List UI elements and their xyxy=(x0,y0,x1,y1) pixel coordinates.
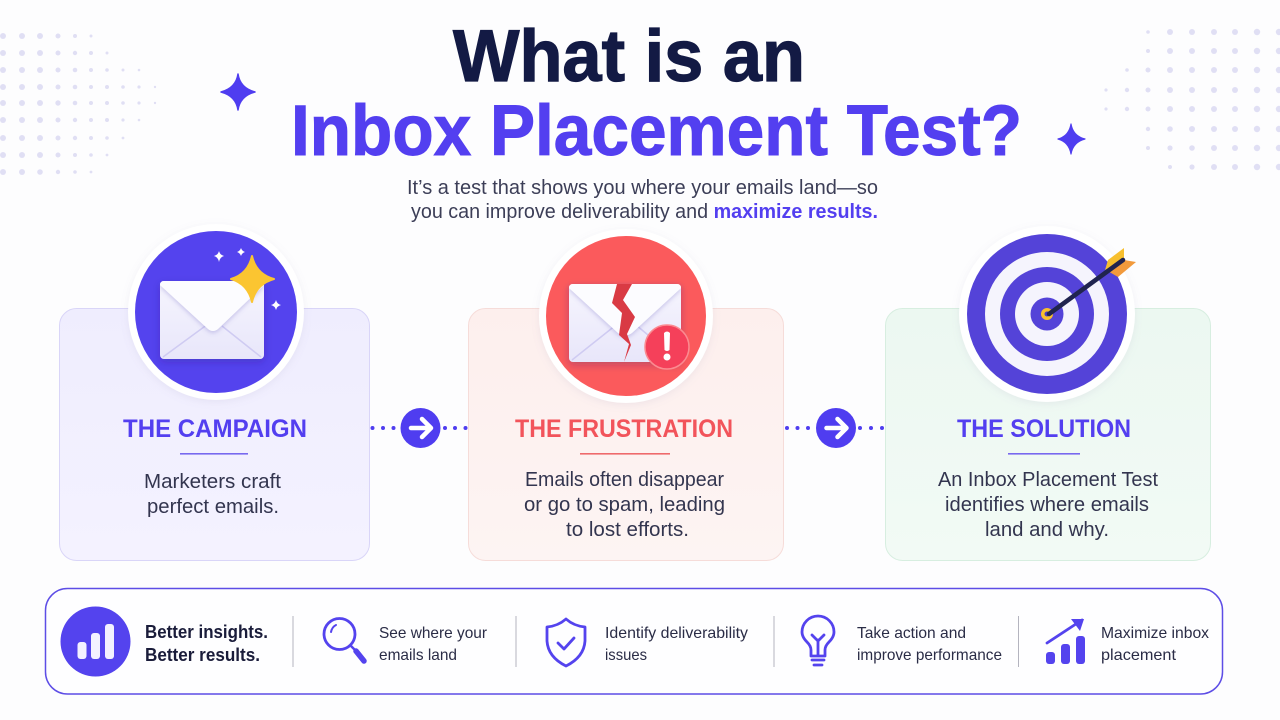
title xyxy=(291,16,1022,171)
subtitle: It’s a test that shows you where your emails land—so xyxy=(407,177,878,199)
subtitle: you can improve deliverability and maximize results. xyxy=(411,201,878,223)
icon: cracked envelope with alert xyxy=(539,229,713,403)
text: maximize inbox placement: Maximize inbox xyxy=(1101,625,1209,642)
panel: the campaign xyxy=(60,224,370,560)
icon: magnifying glass xyxy=(324,618,364,661)
heading: the frustration: THE FRUSTRATION xyxy=(515,415,733,443)
title: Inbox Placement Test? xyxy=(291,92,1022,171)
text: the campaign description xyxy=(144,471,281,518)
dot pattern: top right xyxy=(1104,29,1280,170)
icon: growth chart with arrow xyxy=(1046,619,1085,664)
text: see where your emails land xyxy=(379,625,488,664)
text: better insights: Better results. xyxy=(145,645,260,665)
heading: the solution: THE SOLUTION xyxy=(957,415,1131,443)
icon: bar chart badge xyxy=(60,606,130,676)
text: the solution description: identifies where emails xyxy=(945,494,1149,516)
text: identify deliverability issues xyxy=(605,625,748,664)
icon: envelope with gold sparkle xyxy=(128,224,304,400)
text: maximize inbox placement xyxy=(1101,625,1209,664)
icon: sparkle right of title xyxy=(1058,124,1085,154)
subtitle xyxy=(407,177,878,223)
text: the campaign description: Marketers craft xyxy=(144,471,281,493)
text: identify deliverability issues: Identify deliverability xyxy=(605,625,748,642)
icon: light bulb xyxy=(802,616,834,665)
text: identify deliverability issues: issues xyxy=(605,647,647,664)
heading: the campaign: THE CAMPAIGN xyxy=(123,415,307,443)
text: the solution description: land and why. xyxy=(985,519,1109,541)
text: see where your emails land: See where your xyxy=(379,625,488,642)
text: the frustration description: Emails often disappear xyxy=(525,469,724,491)
text: better insights: Better insights. xyxy=(145,622,268,642)
text: the frustration description xyxy=(524,469,725,541)
text: the solution description: An Inbox Placement Test xyxy=(938,469,1158,491)
text: better insights xyxy=(145,622,268,665)
title: What is an xyxy=(453,16,805,97)
text: maximize inbox placement: placement xyxy=(1101,647,1177,664)
text: the frustration description: to lost efforts. xyxy=(566,519,689,541)
text: the frustration description: or go to spam, leading xyxy=(524,494,725,516)
icon: shield with check xyxy=(547,619,585,666)
text: see where your emails land: emails land xyxy=(379,647,457,664)
text: the solution description xyxy=(938,469,1158,541)
icon: target with arrow xyxy=(959,226,1136,402)
arrow: frustration to solution xyxy=(785,408,884,448)
panel: benefits bar xyxy=(46,588,1222,694)
arrow: campaign to frustration xyxy=(370,408,468,448)
icon: sparkle left of title xyxy=(221,74,255,110)
text: take action and improve performance xyxy=(857,625,1002,664)
text: take action and improve performance: Take action and xyxy=(857,625,966,642)
panel: the frustration xyxy=(468,229,784,560)
text: take action and improve performance: improve performance xyxy=(857,647,1002,664)
dot pattern: top left xyxy=(0,33,156,175)
panel: the solution xyxy=(886,226,1210,560)
text: the campaign description: perfect emails. xyxy=(147,496,279,518)
